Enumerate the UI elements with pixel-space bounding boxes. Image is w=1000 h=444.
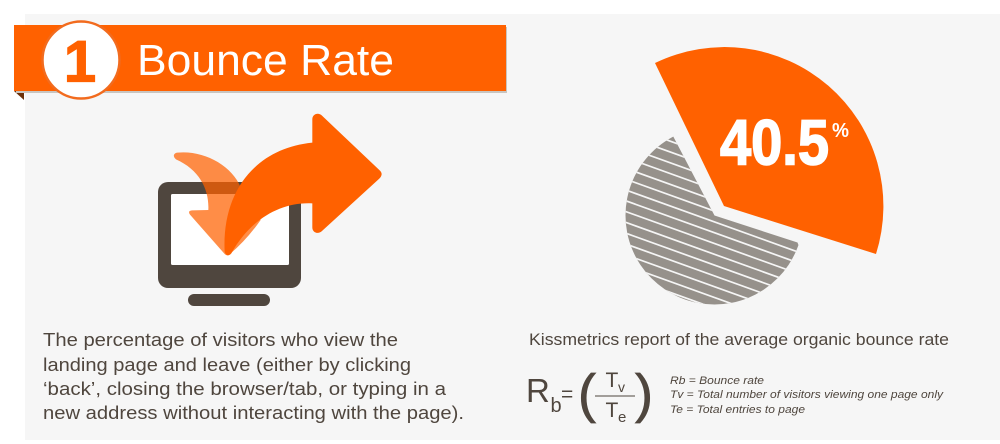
formula legend	[670, 375, 945, 416]
formula: v	[618, 379, 625, 395]
value label: 40.5	[720, 106, 829, 178]
text block: chart caption: Kissmetrics report of the average organic bounce rate	[529, 330, 949, 349]
formula: =	[561, 383, 573, 406]
heading: Bounce Rate	[137, 36, 394, 85]
banner bar	[14, 25, 506, 91]
pie remainder slice: striped	[626, 136, 798, 304]
banner shadow	[16, 27, 507, 93]
formula: (	[578, 364, 596, 424]
formula: T	[606, 369, 618, 392]
arrow: incoming light	[174, 152, 261, 255]
text block: definition: The percentage of visitors who view the	[43, 330, 398, 350]
formula legend: Te = Total entries to page	[670, 404, 805, 416]
formula: e	[618, 409, 626, 426]
formula: b	[550, 395, 562, 417]
formula legend: Rb = Bounce rate	[670, 375, 764, 387]
text block: definition: ‘back’, closing the browser/tab, or typing in a	[43, 379, 447, 399]
formula	[526, 364, 653, 426]
formula: )	[635, 364, 653, 424]
number badge	[42, 22, 120, 98]
title banner	[14, 22, 507, 100]
text block: definition	[43, 330, 464, 423]
banner ribbon fold	[14, 91, 24, 100]
formula: T	[606, 399, 618, 422]
number badge: 1	[64, 30, 96, 94]
formula legend: Tv = Total number of visitors viewing one page only	[670, 389, 945, 401]
icon: monitor with bounce arrows	[158, 114, 382, 306]
arrow: outgoing bold	[224, 114, 382, 255]
pie main slice: orange	[655, 47, 883, 254]
value label: %	[832, 120, 849, 142]
pie chart	[626, 47, 884, 304]
text block: definition: new address without interacting with the page).	[43, 403, 464, 423]
text block: definition: landing page and leave (either by clicking	[43, 355, 411, 375]
monitor	[158, 182, 301, 306]
formula: R	[526, 372, 550, 409]
